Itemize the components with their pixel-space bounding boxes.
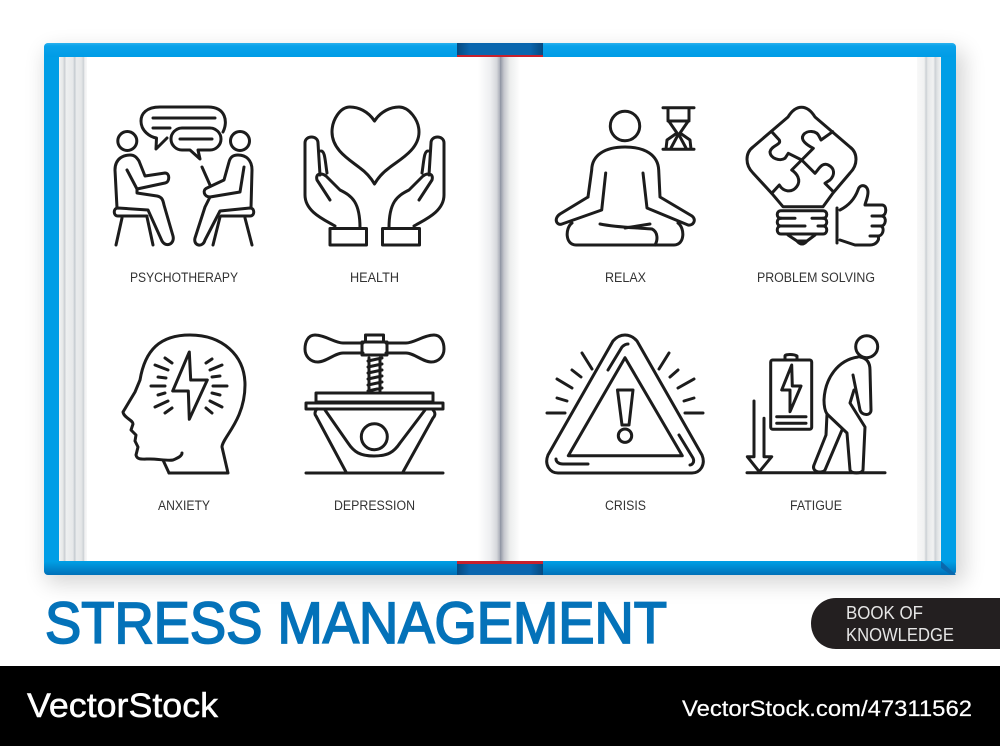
panel: crisis xyxy=(547,335,703,513)
label: health: HEALTH xyxy=(350,270,399,285)
right page stack xyxy=(917,57,941,561)
badge: book of knowledge: BOOK OF xyxy=(846,603,923,623)
badge: book of knowledge xyxy=(811,598,1000,649)
label: depression: DEPRESSION xyxy=(334,498,415,513)
title: STRESS MANAGEMENT xyxy=(45,591,667,656)
panel: relax xyxy=(556,108,694,285)
blue book cover xyxy=(44,43,956,575)
icon: warning triangle xyxy=(547,335,703,473)
label: anxiety: ANXIETY xyxy=(158,498,210,513)
icon: meditating person with hourglass xyxy=(556,108,694,245)
icon: two people talking xyxy=(114,107,254,245)
icon: tired person with low battery xyxy=(747,336,885,473)
icon: head with lightning bolt xyxy=(123,335,245,473)
panel: anxiety xyxy=(123,335,245,513)
pages xyxy=(87,57,917,561)
icon: puzzle light bulb with thumbs up xyxy=(747,107,886,245)
book shadow xyxy=(46,50,964,583)
label: relax: RELAX xyxy=(605,270,646,285)
label: crisis: CRISIS xyxy=(605,498,646,513)
icon: hands holding heart xyxy=(305,107,444,245)
spine top band xyxy=(457,43,543,57)
left page stack xyxy=(59,57,87,561)
footer bar xyxy=(0,666,1000,746)
panel: health xyxy=(305,107,444,285)
panel: problem solving xyxy=(747,107,886,285)
label: problem solving: PROBLEM SOLVING xyxy=(757,270,875,285)
label: psychotherapy: PSYCHOTHERAPY xyxy=(130,270,238,285)
footer bar: VectorStock.com/47311562 xyxy=(682,696,972,721)
panel: fatigue xyxy=(747,336,885,513)
panel: depression xyxy=(305,335,444,513)
label: fatigue: FATIGUE xyxy=(790,498,842,513)
icon: press crushing a person xyxy=(305,335,444,473)
spine bottom band xyxy=(457,561,543,575)
open book xyxy=(44,43,964,583)
footer bar: VectorStock xyxy=(27,687,219,725)
panel: psychotherapy xyxy=(114,107,254,285)
badge: book of knowledge: KNOWLEDGE xyxy=(846,625,954,645)
